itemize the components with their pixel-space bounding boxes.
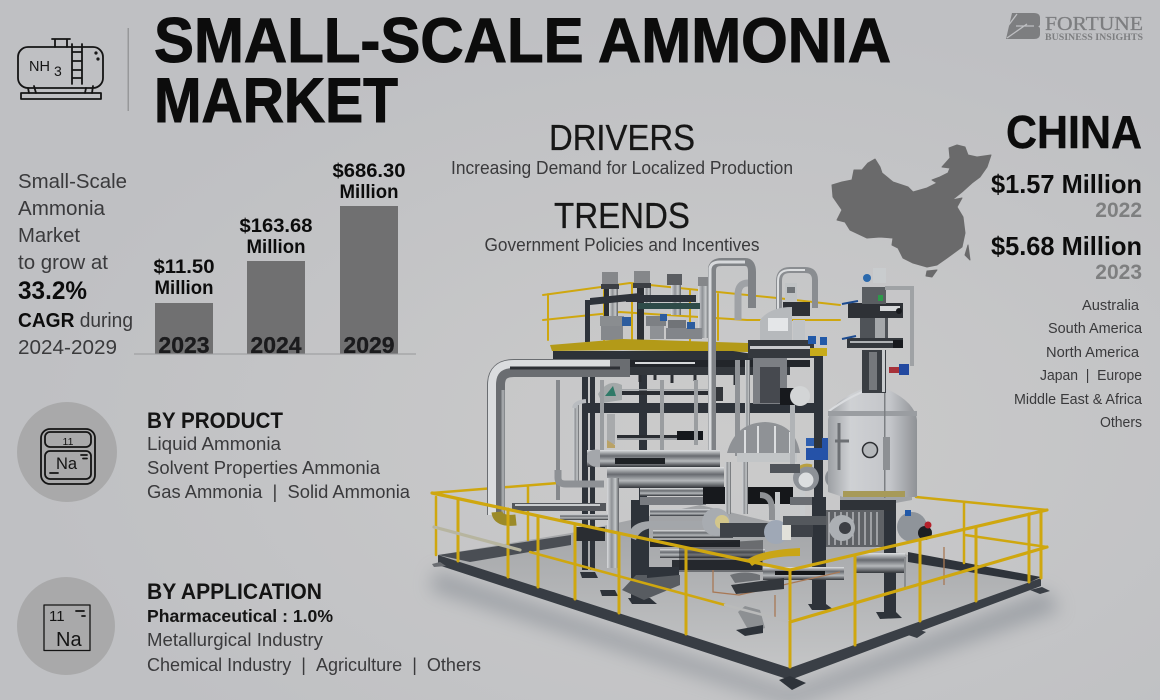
map: China (832, 145, 991, 277)
trends: TRENDS (554, 195, 690, 236)
market growth text: to grow at (18, 251, 108, 274)
lower heat exchanger and pipework (560, 450, 944, 636)
by product text: Gas Ammonia | Solid Ammonia (147, 482, 411, 502)
bar chart: $11.50 (154, 256, 215, 278)
tall pipe loops (710, 262, 815, 452)
drivers: Increasing Demand for Localized Production (451, 158, 793, 178)
logo: Fortune Business Insights (1006, 13, 1143, 43)
front railing rails (432, 493, 1047, 622)
by product text: Liquid Ammonia (147, 434, 282, 454)
icon: ammonia tank: NH (29, 59, 50, 75)
market growth text: 2024-2029 (18, 336, 117, 359)
other regions list: North America (1046, 345, 1140, 361)
icon: by application (17, 577, 115, 675)
front railing posts (458, 499, 1041, 667)
rear railing (432, 482, 1047, 563)
by product text: BY PRODUCT (147, 408, 284, 433)
overhead pipe racks (560, 360, 810, 483)
drivers: DRIVERS (549, 117, 695, 158)
other regions list: Middle East & Africa (1014, 392, 1143, 408)
market growth text: 33.2% (18, 277, 87, 305)
China statistics: $5.68 Million (991, 231, 1142, 261)
China statistics: 2023 (1095, 261, 1142, 284)
market growth text: CAGR during (18, 309, 133, 332)
by application text: BY APPLICATION (147, 579, 322, 604)
other regions list: Australia (1082, 298, 1140, 314)
bar chart: $163.68 (240, 215, 313, 237)
other regions list: South America (1048, 321, 1143, 337)
China statistics: $1.57 Million (991, 169, 1142, 199)
bar chart: Million (340, 181, 398, 203)
bar chart: 2023 (158, 332, 210, 358)
China statistics: CHINA (1006, 106, 1142, 158)
title (154, 6, 891, 136)
platform shadow (430, 570, 1060, 700)
drivers (451, 117, 793, 178)
central cylinder and instruments (727, 283, 838, 465)
by product text: Solvent Properties Ammonia (147, 458, 381, 478)
skid floor (438, 505, 1041, 668)
trends: Government Policies and Incentives (484, 235, 760, 255)
mezzanine deck (550, 339, 810, 352)
icon: by application: Na (56, 629, 82, 651)
icon: by application: 11 (49, 608, 65, 625)
storage vessel (828, 268, 917, 498)
by application text: Metallurgical Industry (147, 630, 323, 650)
bar chart: Million (154, 277, 214, 299)
logo: Fortune Business Insights: FORTUNE (1045, 13, 1143, 35)
trends (484, 195, 760, 255)
illustration: ammonia plant on skid (430, 262, 1060, 700)
icon: ammonia tank: 3 (54, 63, 62, 79)
other regions list: Japan | Europe (1040, 368, 1142, 384)
market growth text: Small-Scale (18, 170, 127, 193)
bar chart: Million (246, 236, 306, 258)
market growth text: Market (18, 224, 80, 247)
market growth text: Ammonia (18, 197, 106, 220)
icon: by product: 11 (63, 436, 74, 448)
by application text: Chemical Industry | Agriculture | Others (147, 655, 481, 675)
other regions list: Others (1100, 415, 1142, 431)
by application text: Pharmaceutical : 1.0% (147, 606, 333, 626)
by application text (147, 579, 481, 675)
title: MARKET (154, 66, 398, 136)
China statistics: 2022 (1095, 199, 1142, 222)
upper railing rear (543, 283, 840, 345)
big chrome elbow pipe (492, 364, 630, 520)
bar chart: $686.30 (332, 160, 406, 182)
bar chart (134, 160, 416, 358)
title: SMALL-SCALE AMMONIA (154, 6, 891, 76)
other regions list (1014, 298, 1143, 431)
icon: by product (17, 402, 117, 502)
mezzanine supports (580, 355, 902, 619)
logo: Fortune Business Insights: BUSINESS INSIGHTS (1045, 33, 1143, 43)
China statistics (991, 106, 1142, 284)
icon: ammonia tank (18, 39, 103, 99)
skid base beams (438, 555, 790, 680)
reactor columns (585, 271, 709, 342)
icon: by product: Na (56, 455, 78, 473)
bar chart: 2024 (250, 332, 302, 358)
by product text (147, 408, 411, 502)
market growth text (18, 170, 133, 359)
bar chart: 2029 (343, 332, 395, 358)
